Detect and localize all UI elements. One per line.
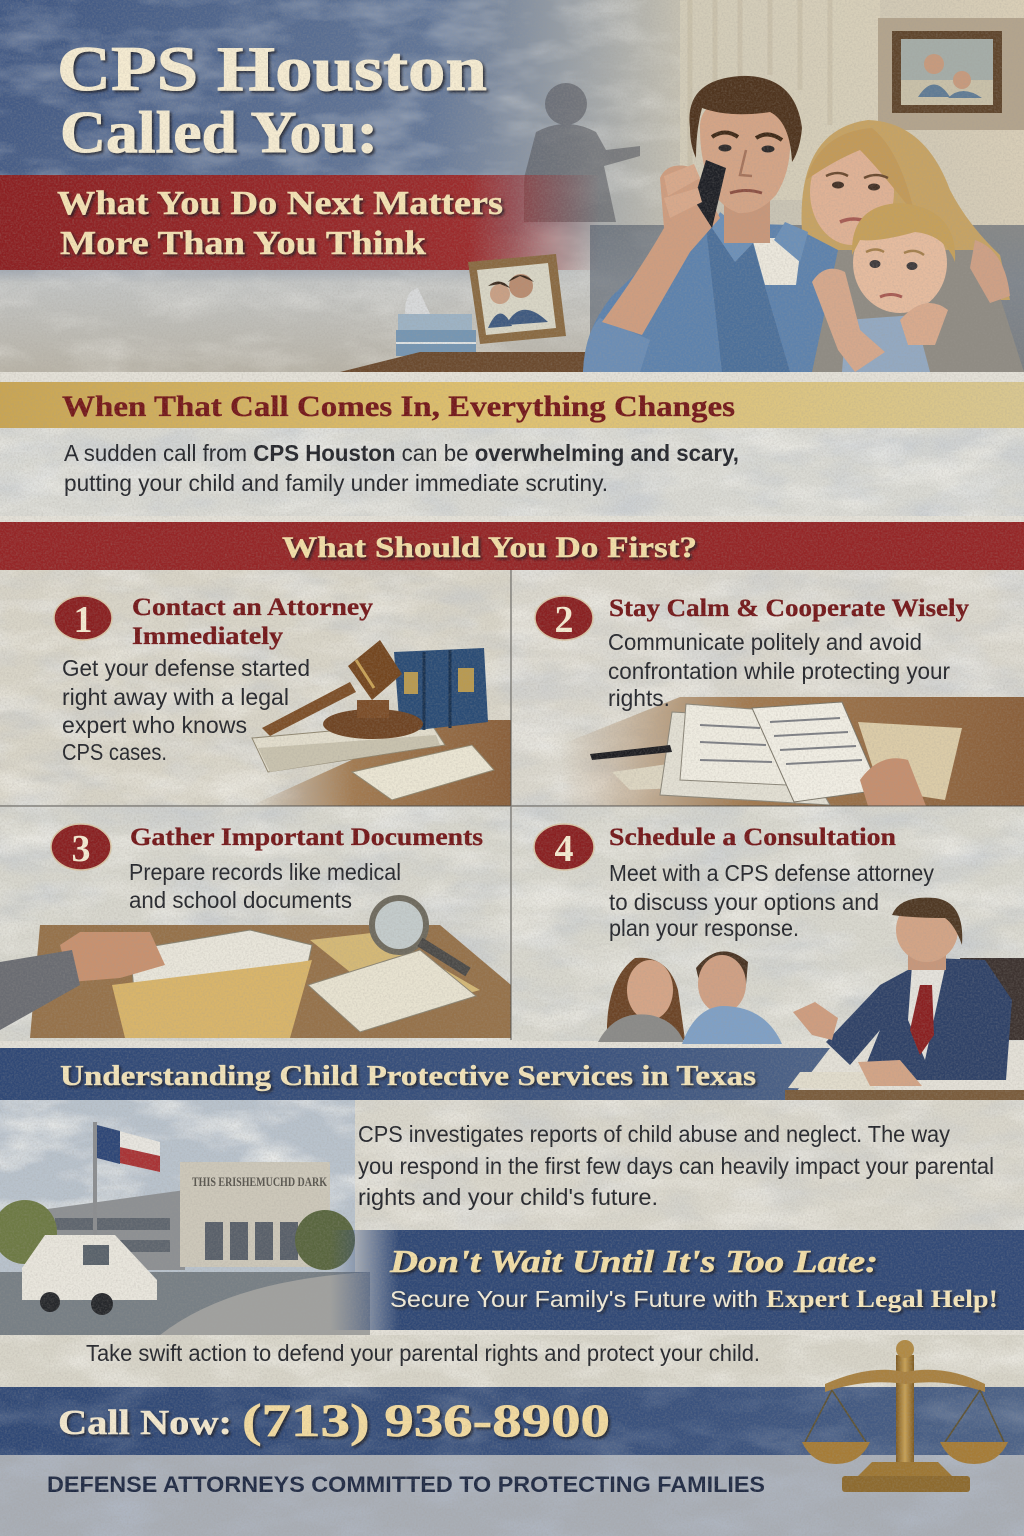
icon: number 3 badge: 3	[72, 828, 90, 870]
child	[812, 203, 1010, 372]
callout text	[390, 1286, 998, 1313]
text block: step 2	[608, 629, 950, 711]
heading: step 3: Gather Important Documents	[130, 824, 483, 851]
panel: CPS in Texas	[0, 1100, 1024, 1335]
panel: step 3	[0, 807, 511, 1041]
subtitle: What You Do Next Matters	[57, 185, 503, 222]
illustration: government building with flag and van: THIS ERISHEMUCHD DARK	[192, 1174, 328, 1189]
icon: number 2 badge: 2	[554, 599, 574, 641]
panel: when that call comes in	[0, 382, 1024, 516]
title: CPS Houston	[57, 34, 487, 104]
call to action phone number: (713) 936-8900	[242, 1395, 610, 1447]
subtitle	[57, 185, 503, 262]
text block: step 2: Communicate politely and avoid	[608, 629, 922, 655]
panel: step 1	[0, 570, 511, 806]
heading: When That Call Comes In, Everything Changes	[62, 390, 735, 423]
callout text: Expert Legal Help!	[766, 1286, 998, 1313]
panel: don't wait callout	[330, 1230, 1024, 1330]
panel: call now band	[0, 1387, 1024, 1455]
text block: step 4: Meet with a CPS defense attorney	[609, 860, 934, 886]
title: Called You:	[60, 99, 378, 165]
panel: swift action text	[0, 1335, 1024, 1387]
text block: A sudden call from CPS Houston can be overwhelming and scary,	[64, 440, 739, 466]
text block: putting your child and family under immediate scrutiny.	[64, 470, 608, 496]
panel: step 2	[512, 570, 1024, 806]
text block: step 1	[62, 655, 310, 765]
text block: step 2: rights.	[608, 685, 670, 711]
icon: desk and papers	[785, 1060, 1024, 1100]
panel: footer	[0, 1455, 1024, 1536]
text block: step 3	[129, 859, 401, 913]
icon: scales of justice	[802, 1340, 1008, 1492]
text block: step 3: Prepare records like medical	[129, 859, 401, 885]
heading: Don't Wait Until It's Too Late:	[389, 1243, 878, 1279]
text block: step 4	[609, 860, 934, 941]
woman	[795, 120, 1024, 372]
icon: number 1 badge	[54, 596, 112, 641]
tagline: DEFENSE ATTORNEYS COMMITTED TO PROTECTING FAMILIES	[47, 1472, 765, 1497]
icon: number 3 badge	[51, 824, 111, 870]
icon: wall picture frame	[878, 18, 1024, 130]
title	[57, 34, 487, 165]
text block: step 4: to discuss your options and	[609, 889, 879, 915]
text block: Take swift action to defend your parental rights and protect your child.	[86, 1340, 760, 1366]
icon: shadow figure in background	[524, 83, 640, 222]
text block: step 1: CPS cases.	[62, 739, 167, 765]
heading: Understanding Child Protective Services in Texas	[60, 1061, 756, 1092]
heading: step 2: Stay Calm & Cooperate Wisely	[609, 595, 970, 622]
panel: hero header	[0, 0, 1024, 372]
illustration: couple meeting attorney	[598, 898, 1024, 1080]
panel: understanding CPS banner	[0, 1048, 1024, 1100]
illustration: family on phone	[583, 76, 1024, 372]
text block	[358, 1121, 994, 1210]
text block: you respond in the first few days can heavily impact your parental	[358, 1153, 994, 1179]
illustration: gavel, books and papers	[250, 640, 511, 806]
panel: what should you do first banner	[0, 522, 1024, 570]
callout text: Secure Your Family's Future with	[390, 1286, 758, 1312]
icon: number 2 badge	[535, 596, 593, 641]
illustration: government building with flag and van	[0, 1122, 370, 1335]
table	[340, 352, 585, 372]
icon: number 4 badge	[534, 824, 594, 870]
call to action phone number	[58, 1395, 610, 1447]
text block: step 1: expert who knows	[62, 712, 247, 738]
text block: step 1: Get your defense started	[62, 655, 310, 681]
icon: number 1 badge: 1	[74, 599, 92, 641]
icon: number 4 badge: 4	[554, 828, 574, 870]
text block: step 4: plan your response.	[609, 915, 799, 941]
text block: step 1: right away with a legal	[62, 684, 289, 710]
subtitle: More Than You Think	[60, 225, 426, 262]
text block: step 3: and school documents	[129, 887, 352, 913]
heading: step 1: Contact an Attorney	[132, 594, 374, 621]
illustration: folder, hand and magnifier	[0, 898, 511, 1038]
text block: step 2: confrontation while protecting your	[608, 658, 950, 684]
heading: step 1	[132, 594, 374, 650]
illustration: documents and pen	[560, 697, 1024, 806]
heading: step 1: Immediately	[132, 623, 284, 650]
icon: family photo on table	[468, 254, 566, 344]
vertical divider	[0, 570, 1024, 1040]
icon: tissue box	[396, 288, 476, 356]
panel: step 4	[512, 807, 1024, 1080]
man	[583, 76, 838, 372]
heading: What Should You Do First?	[282, 531, 697, 564]
call to action phone number: Call Now:	[58, 1403, 232, 1442]
panel: subtitle red band	[0, 175, 600, 270]
heading: step 4: Schedule a Consultation	[609, 824, 896, 851]
text block	[64, 440, 739, 496]
text block: CPS investigates reports of child abuse and neglect. The way	[358, 1121, 950, 1147]
text block: rights and your child's future.	[358, 1184, 658, 1210]
